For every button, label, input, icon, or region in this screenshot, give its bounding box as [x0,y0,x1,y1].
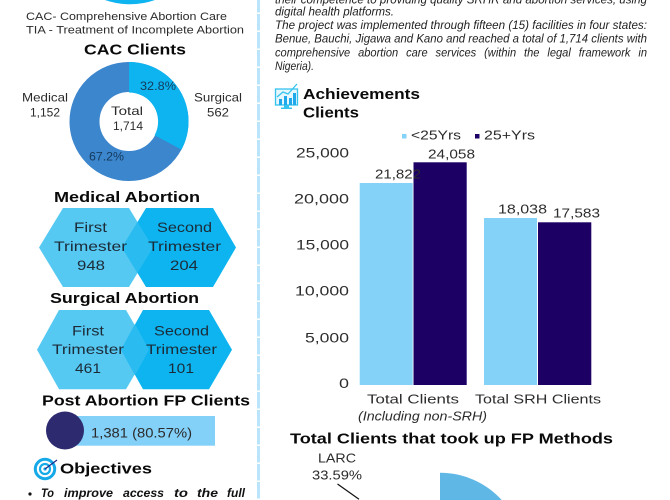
heading: Medical Abortion: Medical Abortion [54,189,200,206]
heading: CAC Clients: CAC Clients [84,42,186,58]
project description text: The project was implemented through fifteen (15) facilities in four states: [275,20,647,32]
donut chart: CAC clients: 1,714 [113,119,143,133]
hexagons: surgical abortion: Trimester [52,341,124,357]
heading: Objectives: Objectives [60,460,152,477]
bar chart: clients by age [294,144,602,424]
bar chart: clients by age: 21,822 [375,166,421,181]
donut chart: CAC clients: Total [111,104,143,118]
hexagons: medical abortion: Second [157,219,212,235]
objective bullet text: access [123,488,164,500]
hexagons: medical abortion: 204 [170,257,198,273]
project description text: comprehensive abortion care services (within the legal framework in [275,48,647,60]
objective bullet text: full [227,488,246,500]
progress bar: post abortion FP clients: 1,381 (80.57%) [91,425,192,441]
hexagons: medical abortion: Trimester [148,238,221,254]
chart legend: 25+Yrs [484,128,535,142]
project description text: digital health platforms. [275,7,394,19]
bar chart: clients by age: 24,058 [428,146,475,161]
hexagons: surgical abortion: Trimester [146,341,217,357]
progress bar: post abortion FP clients [46,412,215,450]
heading: Total Clients that took up FP Methods: Total Clients that took up FP Methods [290,431,613,447]
chart legend: <25Yrs [411,128,461,142]
bar chart: clients by age: 25,000 [296,144,349,160]
hexagons: surgical abortion: Second [154,322,209,338]
heading: Post Abortion FP Clients: Post Abortion FP Clients [42,394,250,410]
bar chart: clients by age: 5,000 [305,329,349,345]
objective bullet text: To [41,488,54,500]
donut chart: CAC clients [22,62,242,166]
bar chart: clients by age: (Including non-SRH) [358,409,487,424]
objective bullet text: improve [64,488,114,500]
bar chart: clients by age: 10,000 [295,283,349,299]
donut chart: CAC clients: Medical [22,90,68,104]
hexagons: surgical abortion: First [72,322,104,338]
project description text: Nigeria). [275,61,314,73]
pie chart fragment: FP methods: LARC [318,450,356,465]
heading: Surgical Abortion: Surgical Abortion [50,290,199,307]
bar chart: clients by age: 17,583 [553,205,600,220]
icon: chart on monitor [276,84,298,109]
hexagons: surgical abortion: 101 [168,360,194,376]
abbreviations legend [26,11,244,37]
icon: target [35,459,57,479]
donut chart: CAC clients: Surgical [194,90,242,104]
donut chart: CAC clients: 67.2% [89,152,124,164]
bar chart: clients by age: Total Clients [367,391,460,406]
hexagons: medical abortion [39,208,236,287]
project description text: Benue, Bauchi, Jigawa and Kano and reached a total of 1,714 clients with [275,34,647,46]
project description text [275,0,648,73]
chart legend [402,128,535,142]
objective bullet text [28,488,246,500]
abbreviations legend: TIA - Treatment of Incomplete Abortion [26,25,244,37]
donut chart: CAC clients: 562 [207,106,229,120]
bar chart: clients by age: 20,000 [294,191,349,207]
abbreviations legend: CAC- Comprehensive Abortion Care [26,11,227,23]
objective bullet text: the [197,488,219,500]
hexagons: medical abortion: 948 [77,257,105,273]
bar chart: clients by age: 18,038 [498,201,547,216]
heading: Achievements Clients [303,86,420,122]
hexagons: surgical abortion [37,310,232,389]
heading: Achievements Clients: Achievements [303,86,420,103]
bar chart: clients by age: Total SRH Clients [475,391,602,406]
hexagons: medical abortion: Trimester [54,238,127,254]
column divider [257,0,260,500]
top circle fragment [105,0,155,4]
hexagons: medical abortion: First [74,219,107,235]
donut chart: CAC clients: 32.8% [140,81,176,93]
donut chart: CAC clients: 1,152 [30,106,60,120]
bar chart: clients by age: 0 [339,375,349,391]
pie chart fragment: FP methods: 33.59% [312,467,362,482]
hexagons: surgical abortion: 461 [75,360,101,376]
objective bullet text: to [174,488,188,500]
pie chart fragment: FP methods [312,450,502,500]
bar chart: clients by age: 15,000 [296,237,349,253]
heading: Achievements Clients: Clients [303,105,359,122]
